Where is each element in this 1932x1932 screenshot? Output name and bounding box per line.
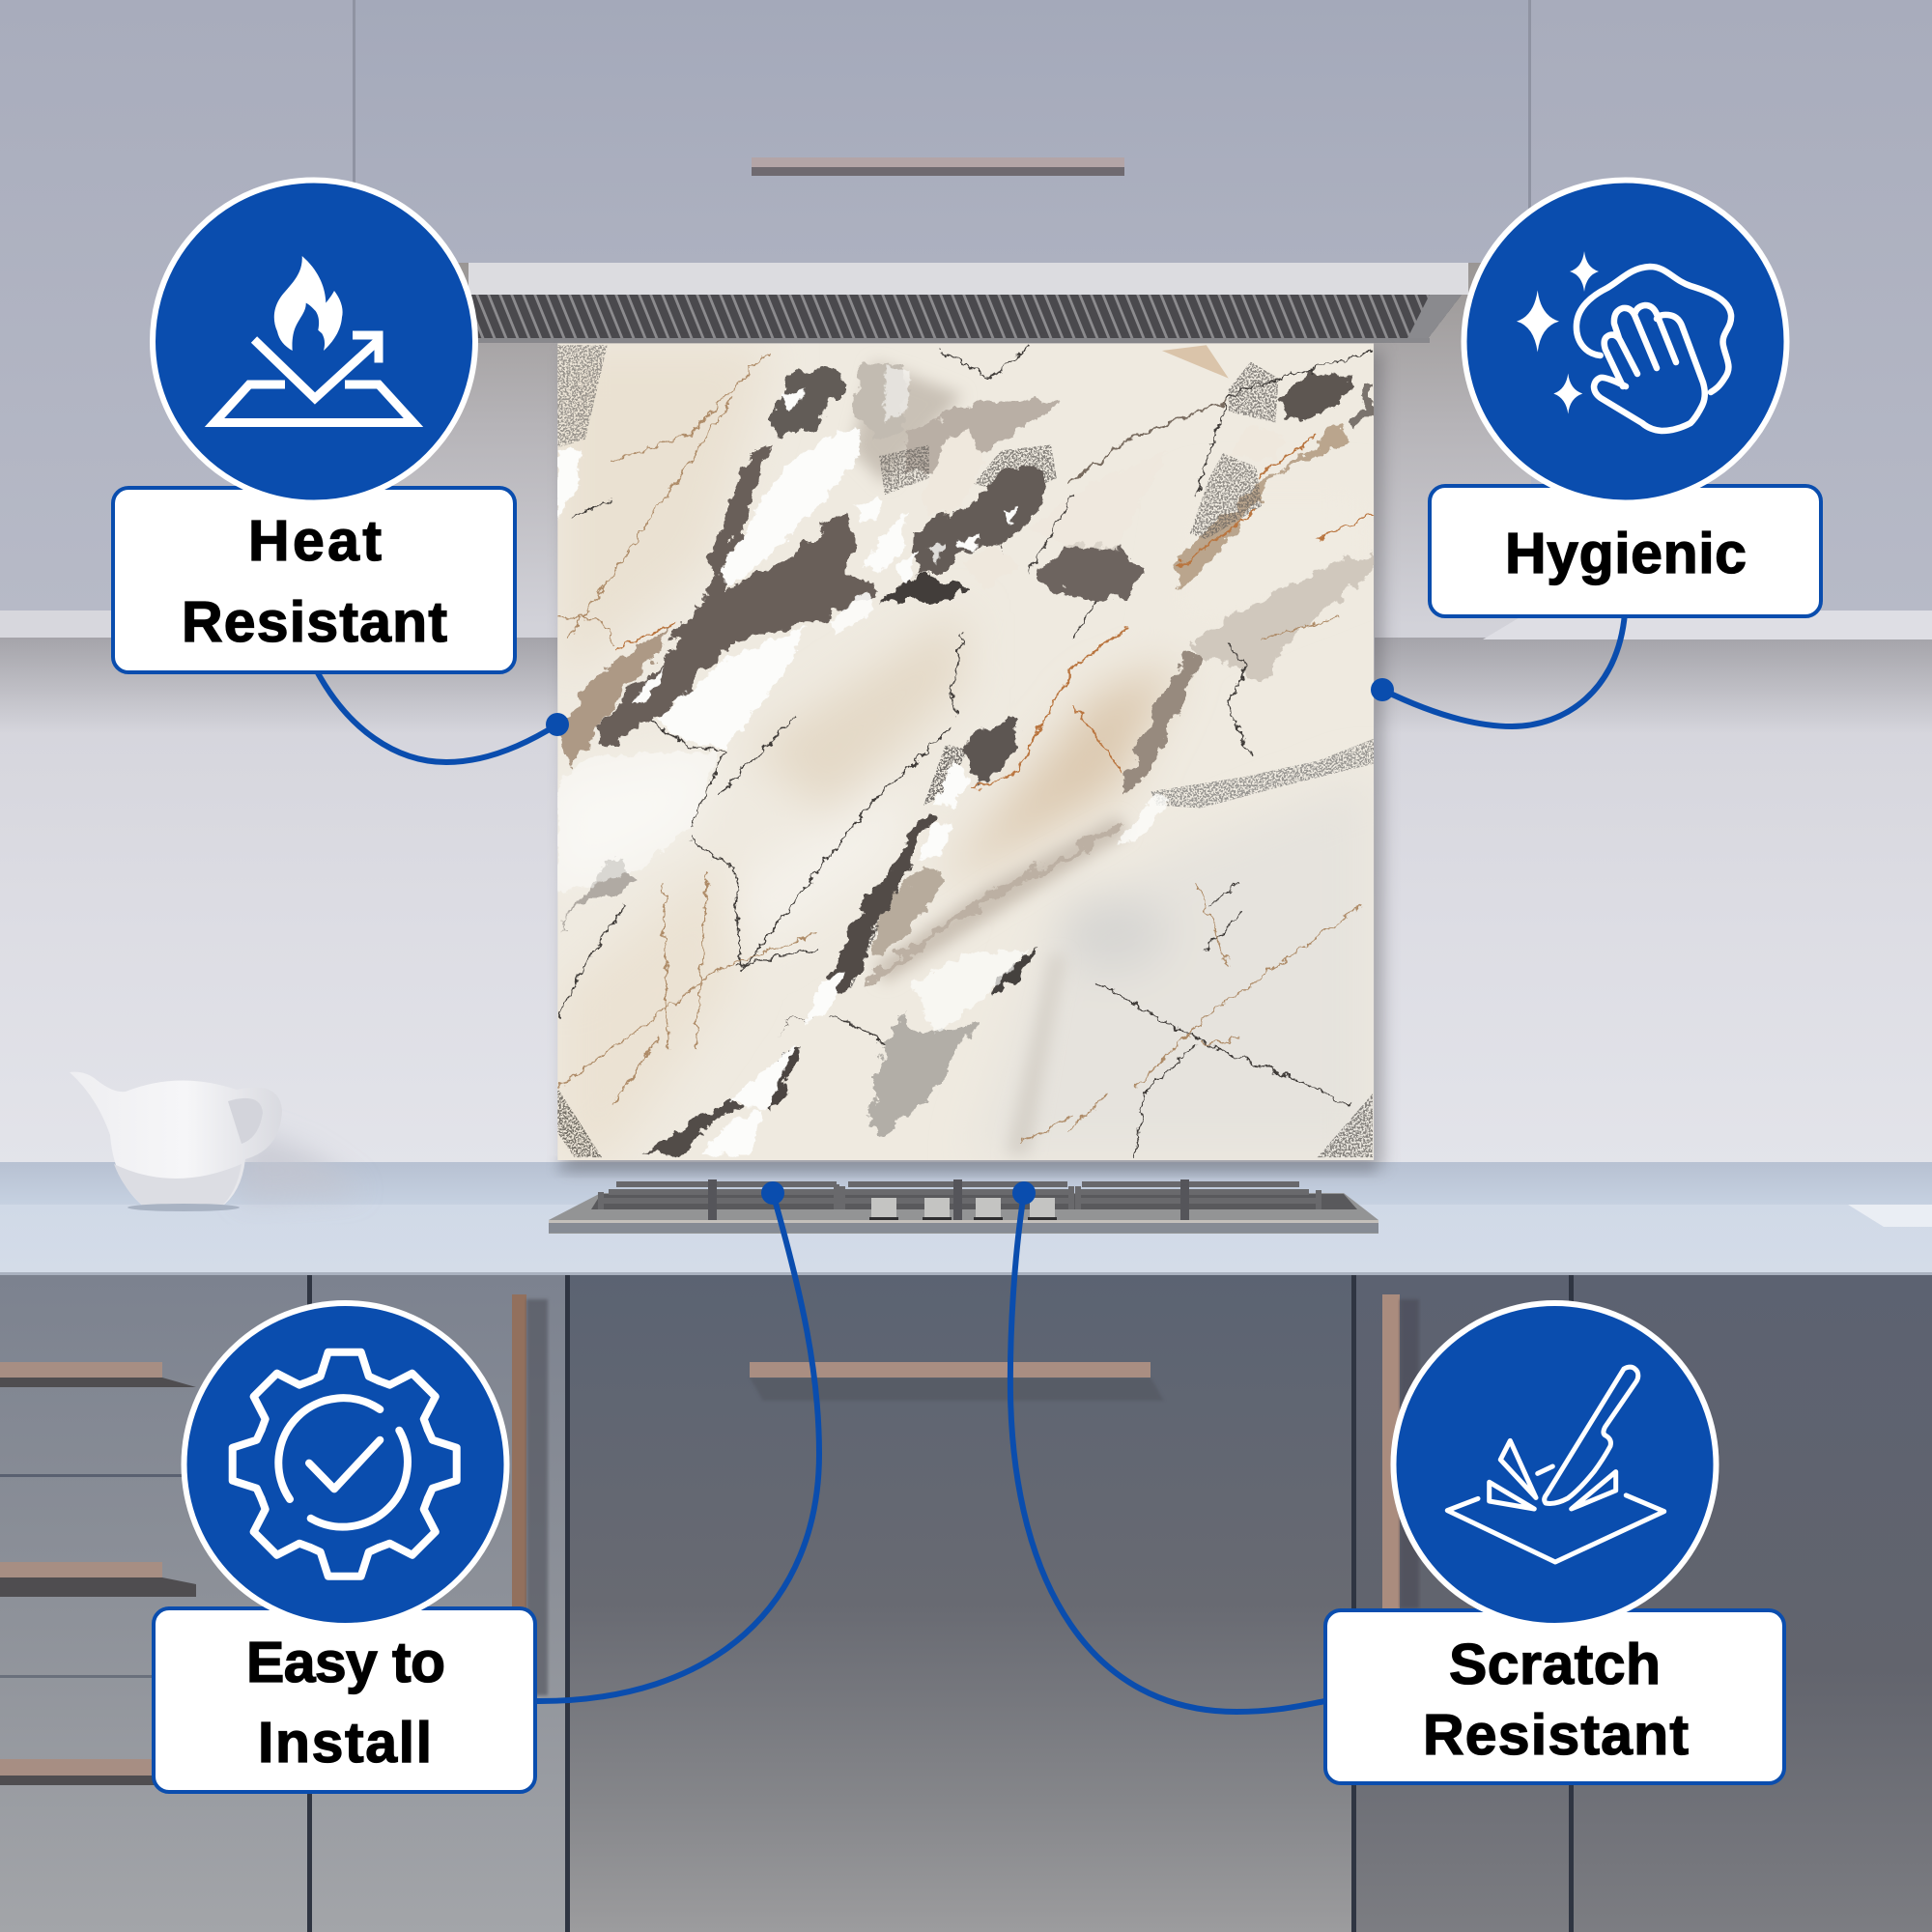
speckled lace zones — [557, 345, 1374, 1157]
lower cabinets — [0, 1275, 1932, 1932]
thin veins — [557, 345, 1373, 1160]
soft taupe wash — [851, 361, 1128, 1154]
label text: Resistant — [1423, 1703, 1689, 1767]
marble splashback panel — [557, 343, 1382, 1168]
connector: Easy to Install — [537, 1181, 819, 1701]
label text: Install — [258, 1711, 432, 1775]
teapot — [70, 1072, 362, 1211]
dark veins — [596, 370, 1373, 1154]
icon: hand wiping with sparkles — [1517, 251, 1731, 431]
hob — [549, 1179, 1378, 1234]
white fragments — [557, 367, 1284, 1154]
panel: Scratch Resistant — [1325, 1303, 1784, 1783]
label box — [1325, 1610, 1784, 1783]
panel: Easy to Install — [154, 1303, 535, 1792]
cabinet handles — [0, 1294, 1419, 1785]
upper cabinets — [0, 0, 1932, 639]
icon badge — [1393, 1303, 1716, 1626]
connector: Hygienic — [1371, 613, 1625, 726]
icon badge — [153, 180, 475, 502]
icon: flame over surface with deflected arrow — [214, 256, 413, 423]
soft taupe veining — [557, 361, 1373, 1132]
icon badge — [1464, 180, 1787, 502]
connector: Scratch Resistant — [1010, 1181, 1325, 1712]
label box — [154, 1608, 535, 1792]
connector: Heat Resistant — [316, 669, 569, 762]
panel: Hygienic — [1430, 180, 1821, 616]
label text: Easy to — [246, 1631, 445, 1694]
label box — [113, 488, 515, 672]
label text: Heat — [248, 509, 382, 573]
label text: Scratch — [1449, 1633, 1661, 1696]
extractor hood — [469, 263, 1468, 343]
worktop — [0, 1160, 1932, 1275]
icon badge — [184, 1303, 506, 1626]
icon: knife scratching surface — [1447, 1367, 1664, 1562]
upper cabinet handle — [752, 157, 1124, 176]
panel: Heat Resistant — [113, 180, 515, 672]
icon: gear with check mark — [233, 1352, 457, 1577]
label text: Resistant — [182, 590, 447, 654]
wall — [0, 263, 1932, 1171]
label box — [1430, 486, 1821, 616]
label text: Hygienic — [1505, 522, 1747, 585]
